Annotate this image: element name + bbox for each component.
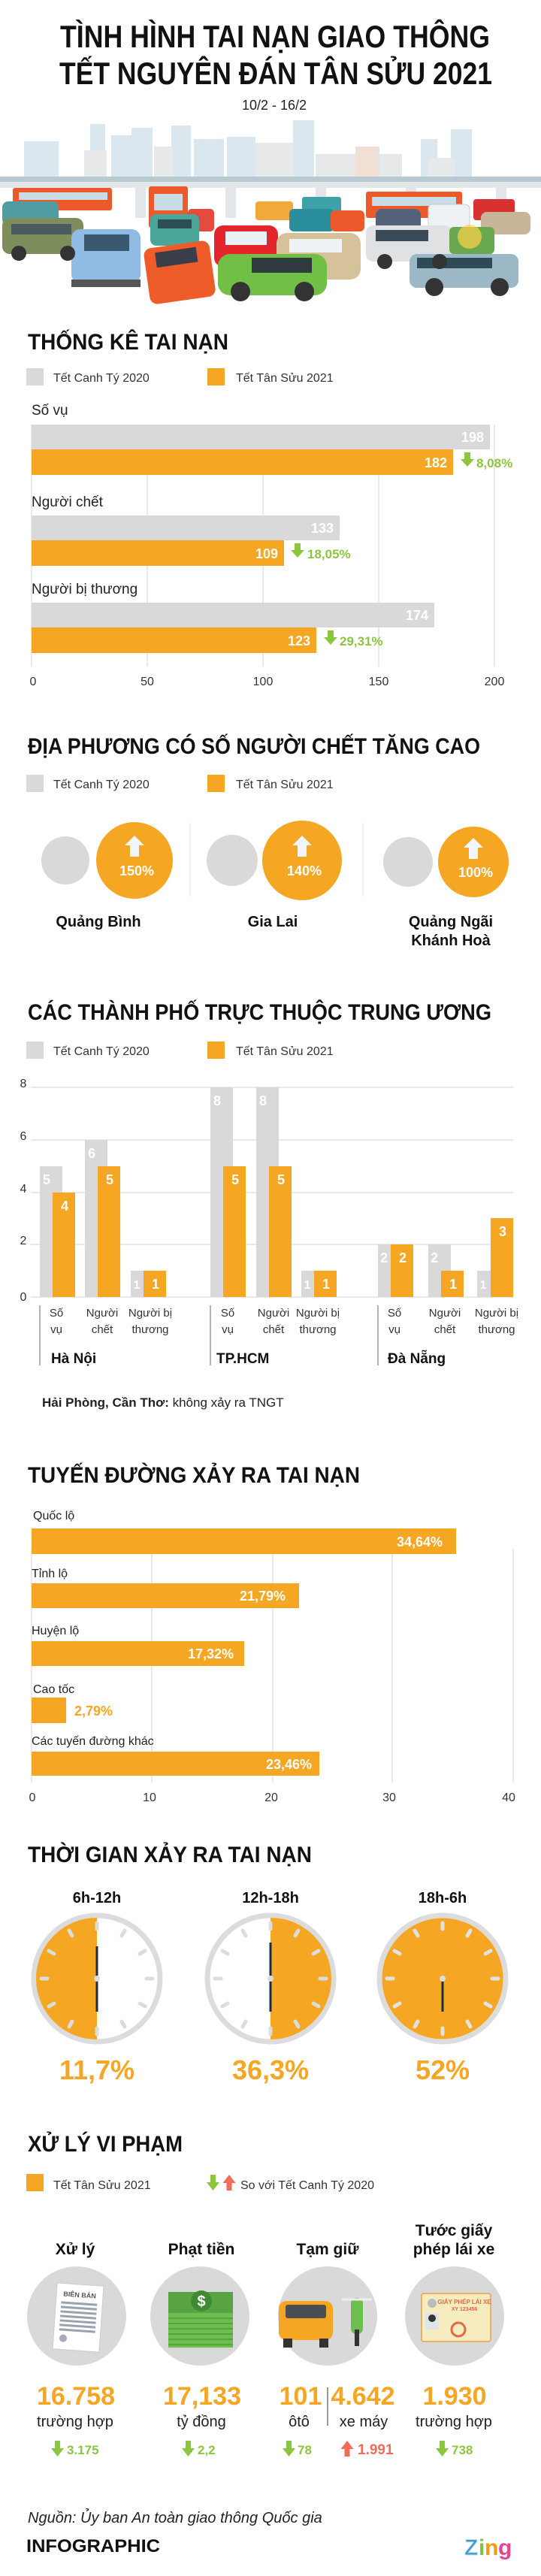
province: Gia Lai: 140% bbox=[287, 863, 322, 878]
bar chart: thống kê: 100 bbox=[253, 676, 273, 688]
icon: money stack: $ bbox=[197, 2293, 206, 2310]
column chart: cities: Người bị bbox=[475, 1307, 518, 1320]
column chart: cities: TP.HCM bbox=[216, 1351, 269, 1367]
column: tạm giữ bbox=[278, 2241, 395, 2458]
bar chart: thống kê: 174 bbox=[406, 608, 428, 623]
column chart: cities: Người bbox=[86, 1307, 118, 1320]
column: tạm giữ: Tạm giữ bbox=[297, 2241, 359, 2258]
bar chart: thống kê: 18,05% bbox=[307, 547, 351, 561]
legend 6 bbox=[26, 2174, 374, 2192]
province: Quảng Bình: 150% bbox=[119, 863, 154, 878]
province: Quảng Ngãi, Khánh Hoà bbox=[383, 827, 509, 949]
column chart: cities: 8 bbox=[20, 1078, 27, 1090]
column: tạm giữ: xe máy bbox=[340, 2414, 388, 2430]
column chart: cities: 2 bbox=[399, 1250, 407, 1265]
column chart: cities: Hà Nội bbox=[51, 1351, 96, 1367]
clock: 12h-18h: 12h-18h bbox=[242, 1890, 299, 1906]
bar chart: road types: 20 bbox=[264, 1791, 278, 1804]
column: tước giấy phép: phép lái xe bbox=[413, 2241, 494, 2258]
column chart: cities: 1 bbox=[304, 1279, 311, 1292]
icon: license card bbox=[422, 2293, 491, 2342]
bar chart: thống kê: Người chết bbox=[32, 494, 104, 510]
bar chart: road types: 30 bbox=[382, 1791, 396, 1804]
column chart: cities: Số bbox=[388, 1307, 402, 1320]
column chart: cities: 5 bbox=[231, 1172, 239, 1187]
column chart: cities: Người bị bbox=[128, 1307, 172, 1320]
clock: 12h-18h bbox=[207, 1890, 334, 2085]
column chart: cities: 0 bbox=[20, 1291, 27, 1304]
column: phạt tiền: 17,133 bbox=[163, 2382, 241, 2411]
column chart: cities: thương bbox=[478, 1323, 515, 1336]
bar chart: road types: 40 bbox=[502, 1791, 515, 1804]
logo: zing bbox=[464, 2535, 512, 2560]
column chart: cities: Số bbox=[221, 1307, 235, 1320]
bar chart: thống kê: 8,08% bbox=[476, 456, 512, 470]
legend 2: Tết Canh Tý 2020 bbox=[53, 779, 150, 791]
column: tạm giữ: 78 bbox=[298, 2443, 312, 2457]
bar chart: thống kê: 182 bbox=[425, 455, 447, 470]
bar chart: thống kê: Số vụ bbox=[32, 403, 68, 419]
column chart: cities: 1 bbox=[322, 1277, 330, 1292]
column chart: cities: Người bbox=[258, 1307, 289, 1320]
province: Gia Lai: Gia Lai bbox=[248, 914, 298, 930]
clock: 18h-6h bbox=[379, 1890, 506, 2085]
province: Quảng Bình bbox=[41, 822, 173, 930]
column: tạm giữ: 101 bbox=[280, 2382, 322, 2411]
legend 1: Tết Canh Tý 2020 bbox=[53, 372, 150, 385]
column: tạm giữ: 1.991 bbox=[358, 2442, 394, 2458]
bar chart: thống kê bbox=[30, 403, 512, 688]
column chart: cities: 1 bbox=[480, 1279, 487, 1292]
bar chart: road types: 21,79% bbox=[240, 1589, 286, 1604]
legend 1: Tết Tân Sửu 2021 bbox=[236, 372, 334, 385]
bar chart: road types: 34,64% bbox=[397, 1534, 443, 1550]
column chart: cities: Số bbox=[50, 1307, 64, 1320]
column chart: cities: Đà Nẵng bbox=[388, 1350, 446, 1367]
bar chart: thống kê: 109 bbox=[255, 546, 278, 561]
bar chart: road types: Các tuyến đường khác bbox=[32, 1735, 154, 1748]
icon: car and scooter bbox=[279, 2298, 372, 2348]
column chart: cities: thương bbox=[299, 1323, 337, 1336]
column chart: cities bbox=[20, 1078, 518, 1367]
province: Quảng Ngãi, Khánh Hoà: Khánh Hoà bbox=[411, 933, 491, 949]
column chart: cities: 5 bbox=[106, 1172, 113, 1187]
column chart: cities: vụ bbox=[222, 1323, 234, 1336]
bar chart: road types: Cao tốc bbox=[33, 1683, 74, 1696]
icon: document bbox=[53, 2283, 104, 2352]
column chart: cities: chết bbox=[92, 1323, 113, 1336]
clock: 6h-12h: 11,7% bbox=[59, 2054, 134, 2085]
note: no accidents: Hải Phòng, Cần Thơ: không xảy ra TNGT bbox=[42, 1395, 284, 1410]
clock: 12h-18h: 36,3% bbox=[232, 2054, 309, 2085]
column: xử lý: 16.758 bbox=[37, 2382, 115, 2411]
column chart: cities: Người bbox=[429, 1307, 461, 1320]
legend 2: Tết Tân Sửu 2021 bbox=[236, 779, 334, 791]
column chart: cities: 6 bbox=[20, 1130, 27, 1143]
bar chart: road types: Quốc lộ bbox=[33, 1510, 74, 1522]
clock: 18h-6h: 52% bbox=[416, 2054, 470, 2085]
column chart: cities: 6 bbox=[88, 1146, 95, 1161]
icon: license card: GIẤY PHÉP LÁI XE bbox=[437, 2298, 491, 2305]
logo: zing: i bbox=[479, 2535, 485, 2560]
column: tước giấy phép: 738 bbox=[452, 2443, 473, 2457]
province: Quảng Ngãi, Khánh Hoà: 100% bbox=[458, 865, 493, 880]
column: tước giấy phép: Tước giấy bbox=[416, 2222, 493, 2239]
column chart: cities: 1 bbox=[152, 1277, 159, 1292]
panel: provinces circles bbox=[41, 821, 509, 949]
bar chart: road types: 23,46% bbox=[266, 1757, 312, 1772]
bar chart: thống kê: Người bị thương bbox=[32, 582, 138, 597]
illustration: traffic jam bbox=[0, 120, 541, 305]
column chart: cities: 4 bbox=[61, 1199, 68, 1214]
clock: 6h-12h bbox=[34, 1890, 160, 2085]
logo: zing: n bbox=[485, 2535, 498, 2560]
column chart: cities: 1 bbox=[449, 1277, 457, 1292]
column chart: cities: 2 bbox=[20, 1235, 27, 1247]
bar chart: road types: 2,79% bbox=[74, 1704, 113, 1719]
footer brand: infographic: INFOGRAPHIC bbox=[26, 2536, 160, 2556]
bar chart: thống kê: 133 bbox=[311, 521, 334, 536]
column chart: cities: 5 bbox=[43, 1172, 50, 1187]
column: xử lý: 3.175 bbox=[67, 2443, 99, 2457]
province: Gia Lai bbox=[207, 821, 342, 930]
heading: thống kê tai nạn: THỐNG KÊ TAI NẠN bbox=[28, 329, 228, 355]
bar chart: road types: Tỉnh lộ bbox=[32, 1568, 68, 1580]
column chart: cities: 3 bbox=[499, 1224, 506, 1239]
legend 2 bbox=[26, 775, 334, 792]
bar chart: thống kê: 50 bbox=[141, 676, 154, 688]
icon: license card: XY 123456 bbox=[452, 2307, 477, 2312]
bar chart: thống kê: 198 bbox=[461, 430, 484, 445]
column chart: cities: 8 bbox=[259, 1093, 267, 1108]
bar chart: thống kê: 123 bbox=[288, 633, 310, 649]
province: Quảng Bình: Quảng Bình bbox=[56, 914, 141, 930]
clock: 6h-12h: 6h-12h bbox=[73, 1890, 121, 1906]
clock: 18h-6h: 18h-6h bbox=[419, 1890, 467, 1906]
logo: zing: Z bbox=[464, 2535, 478, 2560]
column: tước giấy phép bbox=[405, 2222, 504, 2457]
column: xử lý bbox=[27, 2241, 126, 2457]
bar chart: road types bbox=[29, 1510, 515, 1804]
column chart: cities: vụ bbox=[50, 1323, 62, 1336]
heading: thời gian: THỜI GIAN XẢY RA TAI NẠN bbox=[28, 1842, 312, 1867]
column chart: cities: 5 bbox=[277, 1172, 285, 1187]
column: xử lý: trường hợp bbox=[37, 2414, 113, 2430]
column chart: cities: thương bbox=[131, 1323, 169, 1336]
legend 3: Tết Canh Tý 2020 bbox=[53, 1045, 150, 1058]
bar chart: road types: 17,32% bbox=[188, 1646, 234, 1661]
bar chart: road types: Huyện lộ bbox=[32, 1625, 79, 1637]
legend 3 bbox=[26, 1042, 334, 1059]
column chart: cities: chết bbox=[434, 1323, 456, 1336]
column chart: cities: vụ bbox=[388, 1323, 400, 1336]
source note: Nguồn: Ủy ban An toàn giao thông Quốc gia bbox=[28, 2508, 322, 2526]
column chart: cities: 8 bbox=[213, 1093, 221, 1108]
column chart: cities: Người bị bbox=[296, 1307, 340, 1320]
province: Quảng Ngãi, Khánh Hoà: Quảng Ngãi bbox=[409, 914, 493, 930]
column: tạm giữ: ôtô bbox=[289, 2414, 310, 2430]
bar chart: thống kê: 200 bbox=[485, 676, 504, 688]
legend 6: So với Tết Canh Tý 2020 bbox=[240, 2179, 374, 2192]
column chart: cities: chết bbox=[263, 1323, 285, 1336]
column: phạt tiền bbox=[150, 2241, 249, 2457]
column: phạt tiền: 2,2 bbox=[198, 2443, 216, 2457]
column: tước giấy phép: 1.930 bbox=[422, 2382, 487, 2411]
title bbox=[59, 18, 492, 91]
icon: document: BIÊN BẢN bbox=[63, 2290, 96, 2300]
bar chart: road types: 10 bbox=[143, 1791, 156, 1804]
heading: các thành phố: CÁC THÀNH PHỐ TRỰC THUỘC TRUNG ƯƠNG bbox=[28, 999, 491, 1025]
legend 1 bbox=[26, 368, 334, 385]
column chart: cities: 1 bbox=[134, 1279, 141, 1292]
icon: money stack bbox=[168, 2290, 233, 2348]
column chart: cities: 2 bbox=[431, 1250, 438, 1265]
column: phạt tiền: Phạt tiền bbox=[168, 2241, 234, 2258]
logo: zing: g bbox=[498, 2535, 512, 2560]
heading: địa phương: ĐỊA PHƯƠNG CÓ SỐ NGƯỜI CHẾT TĂNG CAO bbox=[28, 733, 480, 759]
bar chart: road types: 0 bbox=[29, 1791, 36, 1804]
column chart: cities: 4 bbox=[20, 1183, 27, 1196]
column: phạt tiền: tỷ đồng bbox=[177, 2414, 226, 2430]
bar chart: thống kê: 29,31% bbox=[340, 634, 383, 649]
column chart: cities: 2 bbox=[380, 1250, 388, 1265]
column: tạm giữ: 4.642 bbox=[331, 2382, 395, 2411]
column: tước giấy phép: trường hợp bbox=[416, 2414, 492, 2430]
heading: xử lý vi phạm: XỬ LÝ VI PHẠM bbox=[28, 2131, 183, 2157]
column: xử lý: Xử lý bbox=[56, 2241, 95, 2258]
bar chart: thống kê: 150 bbox=[369, 676, 388, 688]
bar chart: thống kê: 0 bbox=[30, 676, 37, 688]
legend 6: Tết Tân Sửu 2021 bbox=[53, 2179, 151, 2192]
legend 3: Tết Tân Sửu 2021 bbox=[236, 1045, 334, 1058]
heading: tuyến đường: TUYẾN ĐƯỜNG XẢY RA TAI NẠN bbox=[28, 1462, 360, 1488]
date subtitle: 10/2 - 16/2 bbox=[242, 98, 307, 113]
